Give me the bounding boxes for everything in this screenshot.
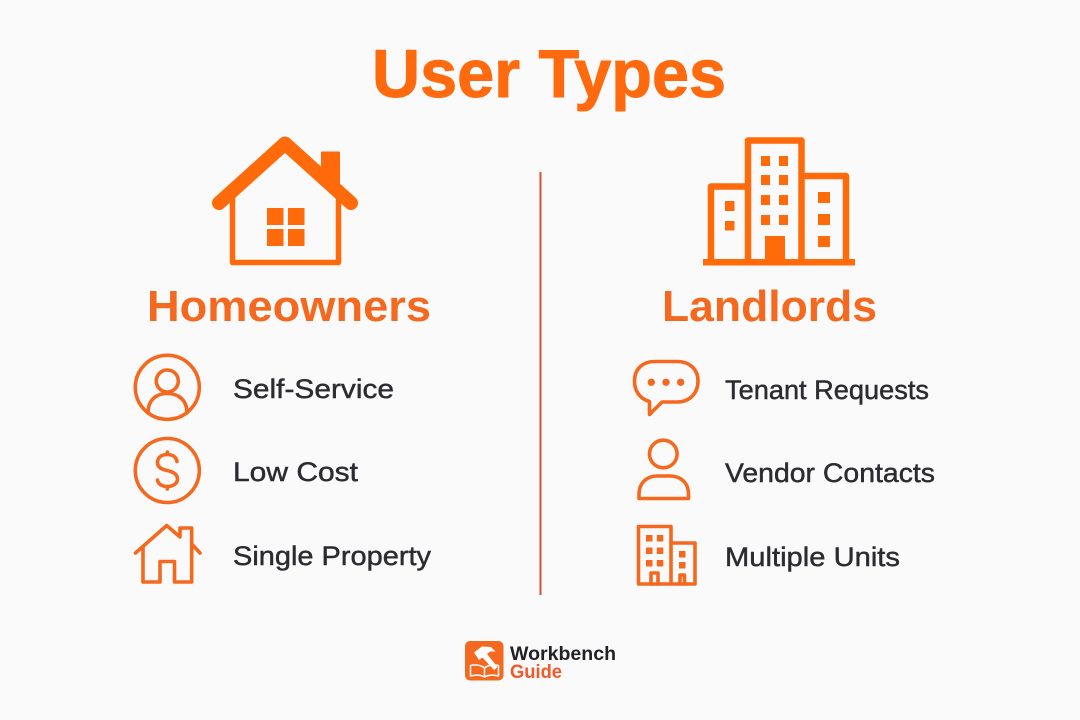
icon: large house [219, 144, 351, 262]
icon: speech bubble [634, 362, 698, 414]
heading: landlords: Landlords [662, 282, 877, 331]
divider [540, 172, 542, 595]
icon: small buildings [638, 526, 695, 584]
logo: workbench guide [465, 641, 616, 683]
label: tenant requests: Tenant Requests [725, 375, 929, 405]
title: User Types [372, 36, 726, 112]
label: single property: Single Property [233, 541, 432, 571]
icon: dollar coin [135, 438, 199, 502]
label: self-service: Self-Service [233, 374, 394, 404]
panel: homeowners [135, 144, 432, 582]
label: multiple units: Multiple Units [725, 542, 900, 572]
label: low cost: Low Cost [233, 457, 359, 487]
icon: person in circle [135, 355, 199, 419]
wordmark accent: Guide [510, 662, 562, 683]
icon: small house [136, 526, 200, 582]
wordmark: Workbench [510, 644, 616, 665]
icon: hammer and book [465, 641, 504, 680]
heading: homeowners: Homeowners [147, 282, 431, 331]
panel: landlords [634, 140, 935, 584]
icon: large buildings [703, 140, 855, 266]
label: vendor contacts: Vendor Contacts [725, 458, 935, 488]
icon: person [639, 440, 688, 498]
